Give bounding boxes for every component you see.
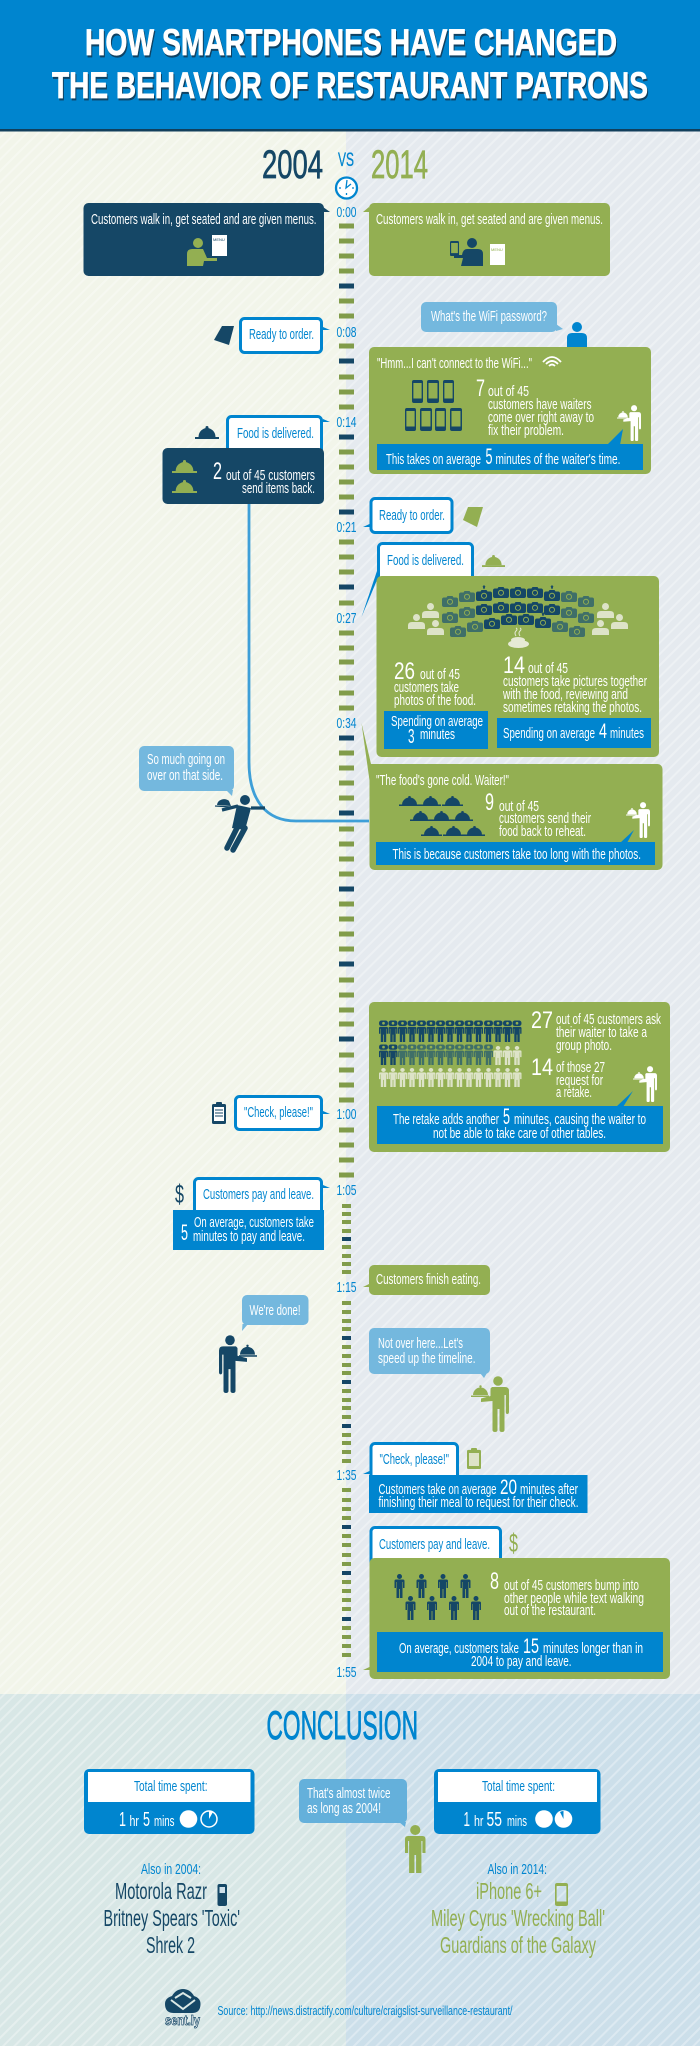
text: Customers walk in, get seated and are given menus. [91,212,316,228]
panel: 2014 walking out [363,1558,670,1679]
logo: sent.ly [165,1989,200,2028]
icon: razr phone [218,1884,227,1906]
icon: clock [336,178,357,198]
stat: 2 out of 45: 2 [213,458,222,485]
year headings: 2014 [371,143,428,187]
icon: white waiter [633,1066,657,1102]
callout strip: 5 [503,1104,510,1129]
year headings: VS [338,150,354,171]
box: customers finish eating: Customers finish eating. [376,1272,481,1288]
value: 1 hr 55 mins: 55 [486,1809,502,1831]
speech bubble: wifi password [421,302,563,332]
stat: 7 out of 45: come over right away to [488,410,594,426]
stat: 26 out of 45 [394,658,476,709]
icon: dark dollar: $ [175,1179,184,1209]
box: 2004 food is delivered [228,416,330,456]
speech bubble: almost twice as long [299,1779,407,1827]
icon: customer with menu: MENU [213,237,225,242]
value: 1 hr 5 mins: 5 [143,1809,150,1831]
callout strip: minutes of the waiter's time. [496,452,620,468]
panel: 2004 pay time [173,1210,324,1250]
stat: 14 of those 27: request for [556,1073,603,1089]
panel: 2014 customers walk in [363,203,610,276]
callout: spending 4 minutes: 4 [599,720,607,743]
icon: green dollar: $ [509,1528,518,1558]
box: 2004 customers pay and leave: Customers pay and leave. [203,1187,314,1203]
panel: 2004 items sent back [162,448,324,504]
stat: 7 out of 45: customers have waiters [488,397,592,413]
year headings: 2004 [262,143,323,187]
quote: "Hmm...I can't connect to the WiFi..." [377,356,532,372]
list: also in 2004 [104,1861,240,1958]
icon: clocks [535,1810,572,1828]
icon: dark cameras [476,585,560,629]
panel: 2004 pay time: On average, customers take [194,1215,314,1231]
stat: 26 out of 45: photos of the food. [394,693,476,709]
stat: 14 of those 27: 14 [531,1054,553,1081]
icon: green cloche [482,555,505,567]
stat: 8 out of 45 [490,1568,644,1619]
callout strip [376,830,655,865]
callout strip: 5 [486,444,492,469]
stat: 8 out of 45: out of the restaurant. [504,1603,596,1619]
speech bubble: almost twice as long: as long as 2004! [307,1801,381,1817]
icon: customer with phone and menu: MENU [491,247,503,252]
callout: spending 3 minutes: Spending on average [391,714,483,730]
panel: 2014 total time [434,1769,600,1834]
panel: 2014 group photo [369,1002,670,1152]
stat: 27 out of 45: group photo. [556,1038,612,1054]
icon: dark menu [214,326,234,345]
panel: 2014 request time: 20 [500,1476,517,1499]
box: 2014 customers pay and leave [371,1528,500,1568]
panel: 2004 customers walk in [84,203,330,276]
stat: 7 out of 45: fix their problem. [488,423,564,439]
callout: spending 3 minutes [384,711,488,749]
value: 1 hr 55 mins [464,1809,527,1831]
icon: eight people [394,1574,481,1620]
panel: 2004 total time [84,1769,254,1834]
value: 1 hr 5 mins: mins [154,1814,174,1830]
callout strip: On average, customers take [399,1641,519,1657]
icon: iphone [555,1883,568,1906]
icon: blue customer [567,322,587,350]
panel: 2014 food gone cold [370,764,662,870]
stat: 14 of those 27: of those 27 [556,1060,605,1076]
speech bubble: so much going on: So much going on [147,752,225,768]
panel: 2014 food photos [376,576,659,757]
box: 2004 ready to order: Ready to order. [249,327,314,343]
list: also in 2004: Also in 2004: [141,1861,201,1878]
stat: 26 out of 45: customers take [394,680,459,696]
list: also in 2014: Miley Cyrus 'Wrecking Ball' [431,1905,605,1931]
timeline time labels: 0:27 [336,611,356,627]
icon: people grid [379,1020,522,1087]
panel: 2004 pay time: 5 [181,1220,188,1245]
callout strip [377,429,643,470]
callout strip: 2004 to pay and leave. [471,1654,572,1670]
stat: 27 out of 45 [531,1007,662,1054]
box: 2014 food is delivered [378,544,472,584]
stat: 8 out of 45: out of 45 customers bump into [504,1578,639,1594]
box: customers finish eating [363,1265,490,1295]
timeline time labels: 1:05 [336,1183,356,1199]
callout: spending 4 minutes: Spending on average [503,726,595,742]
list: also in 2004: Motorola Razr [115,1878,207,1904]
icon: dark clipboard [212,1102,226,1124]
box: 2004 ready to order [240,318,330,352]
icon: green customer [405,1825,426,1873]
timeline time labels: 0:34 [336,716,356,732]
panel: 2014 request time: finishing their meal to request for their check. [378,1495,578,1511]
speech bubble: wifi password: What's the WiFi password? [431,309,547,325]
speech bubble: not over here: speed up the timeline. [378,1351,476,1367]
stat: 9 out of 45: customers send their [499,811,591,827]
speech bubble: we're done: We're done! [250,1303,300,1319]
panel: 2014 request time: Customers take on average [378,1482,496,1498]
stat: 2 out of 45: send items back. [242,481,315,497]
icon: white waiter [626,802,650,838]
stat: 9 out of 45 [485,789,591,840]
stat: 2 out of 45: out of 45 customers [226,468,315,484]
value: 1 hr 5 mins [119,1809,174,1831]
stat: 27 out of 45: 27 [531,1007,553,1034]
stat: 14 out of 45: 14 [503,652,525,679]
panel: 2014 wifi trouble [369,347,651,474]
box: 2014 ready to order: Ready to order. [379,508,445,524]
speech bubble: not over here: Not over here...Let's [378,1336,463,1352]
speech bubble: we're done [242,1295,308,1331]
stat: 9 out of 45: 9 [485,789,494,816]
box: 2004 check please [236,1096,330,1130]
title [52,22,648,106]
pointer: blue to 0:27 [362,565,379,617]
icon: nine cloches [399,796,485,836]
pointer: green to 0:34 [362,723,377,784]
icon: wifi [543,357,561,366]
callout strip: 15 [523,1635,539,1658]
list: also in 2004: Shrek 2 [146,1932,195,1958]
callout: spending 3 minutes: 3 [408,726,414,748]
box: 2004 food is delivered: Food is delivered. [237,426,314,442]
stat: 7 out of 45 [476,375,594,439]
stat: 7 out of 45: 7 [476,375,485,402]
panel: 2004 total time: Total time spent: [134,1779,208,1795]
icon: two cloches [172,460,197,493]
value: 1 hr 5 mins: 1 [119,1809,126,1831]
stat: 7 out of 45: out of 45 [488,384,529,400]
icon: dark waiter [219,1335,257,1393]
list: also in 2014: Also in 2014: [488,1861,547,1878]
quote: "The food's gone cold. Waiter!" [376,773,509,789]
stat: 8 out of 45: other people while text walking [504,1591,644,1607]
connector line [249,504,369,821]
timeline ticks [339,226,354,1655]
icon: clocks [180,1810,217,1828]
list: also in 2014: Guardians of the Galaxy [440,1932,596,1958]
icon: seven phones [405,380,462,431]
box: 2004 customers pay and leave [194,1178,330,1218]
stat: 9 out of 45: food back to reheat. [499,824,586,840]
panel: 2014 total time: Total time spent: [482,1779,555,1795]
list: also in 2014 [431,1861,605,1958]
callout strip: minutes longer than in [543,1641,643,1657]
icon: white waiter [617,405,641,441]
panel: 2014 request time: minutes after [520,1482,578,1498]
panel: 2014 request time [369,1475,588,1513]
list: also in 2014: iPhone 6+ [476,1878,542,1904]
speech bubble: not over here [369,1328,490,1378]
timeline time labels: 1:35 [336,1468,356,1484]
callout strip: not be able to take care of other tables. [433,1126,606,1142]
icon: dark cloche [195,426,219,439]
stat: 14 of those 27 [531,1054,605,1101]
stat: 14 out of 45 [502,652,647,716]
icon: plate of food [508,628,529,648]
stat: 14 out of 45: with the food, reviewing and [502,687,628,703]
box: 2014 food is delivered: Food is delivered. [387,553,464,569]
timeline time labels [336,205,356,1681]
icon: green clipboard [467,1448,481,1469]
box: 2014 check please [363,1444,458,1484]
speech bubble: so much going on [139,746,234,796]
icon: faded cameras [442,591,594,637]
speech bubble: so much going on: over on that side. [147,768,223,784]
callout strip [377,1632,663,1672]
box: 2004 check please: "Check, please!" [244,1105,313,1121]
stat: 2 out of 45 [213,458,315,497]
stat: 14 out of 45: out of 45 [528,661,568,677]
timeline time labels: 1:55 [336,1665,356,1681]
year headings [262,143,428,187]
value: 1 hr 55 mins: 1 [464,1809,470,1831]
timeline time labels: 0:14 [336,415,356,431]
icon: green waiter [471,1376,509,1432]
callout strip: This takes on average [386,452,481,468]
stat: 8 out of 45: 8 [490,1568,499,1595]
icon: customer with menu [187,235,227,266]
icon: leaning waiter [215,795,265,850]
timeline time labels: 1:15 [336,1280,356,1296]
logo: sent.ly: sent.ly [165,2012,200,2028]
callout: spending 3 minutes: minutes [420,727,455,743]
panel: 2004 pay time: minutes to pay and leave. [193,1229,305,1245]
icon: customer with phone and menu [450,238,505,266]
conclusion heading: CONCLUSION [266,1704,418,1748]
box: 2014 check please: "Check, please!" [380,1452,449,1468]
value: 1 hr 55 mins: mins [507,1814,527,1830]
stat: 14 out of 45: sometimes retaking the photos. [503,700,642,716]
speech bubble: almost twice as long: That's almost twice [307,1786,390,1802]
stat: 26 out of 45: 26 [394,658,415,685]
source: Source: http://news.distractify.com/culture/craigslist-surveillance-restaurant/ [218,2003,513,2018]
header banner [0,0,700,132]
stat: 14 of those 27: a retake. [556,1085,592,1101]
value: 1 hr 55 mins: hr [474,1814,484,1830]
box: 2014 ready to order [363,498,452,532]
callout strip: The retake adds another [393,1112,499,1128]
value: 1 hr 5 mins: hr [130,1814,139,1830]
callout strip [377,1091,663,1144]
timeline time labels: 0:08 [336,325,356,341]
callout: spending 4 minutes [497,718,651,748]
timeline time labels: 1:00 [336,1107,356,1123]
icon: diners [408,603,628,635]
box: 2014 customers pay and leave: Customers pay and leave. [379,1537,490,1553]
timeline time labels: 0:00 [336,205,356,221]
stat: 26 out of 45: out of 45 [420,667,460,683]
icon: green menu [463,507,483,527]
callout: spending 4 minutes: minutes [610,726,644,742]
stat: 27 out of 45: their waiter to take a [556,1025,648,1041]
list: also in 2004: Britney Spears 'Toxic' [104,1905,240,1931]
stat: 9 out of 45: out of 45 [499,799,539,815]
timeline time labels: 0:21 [336,520,356,536]
